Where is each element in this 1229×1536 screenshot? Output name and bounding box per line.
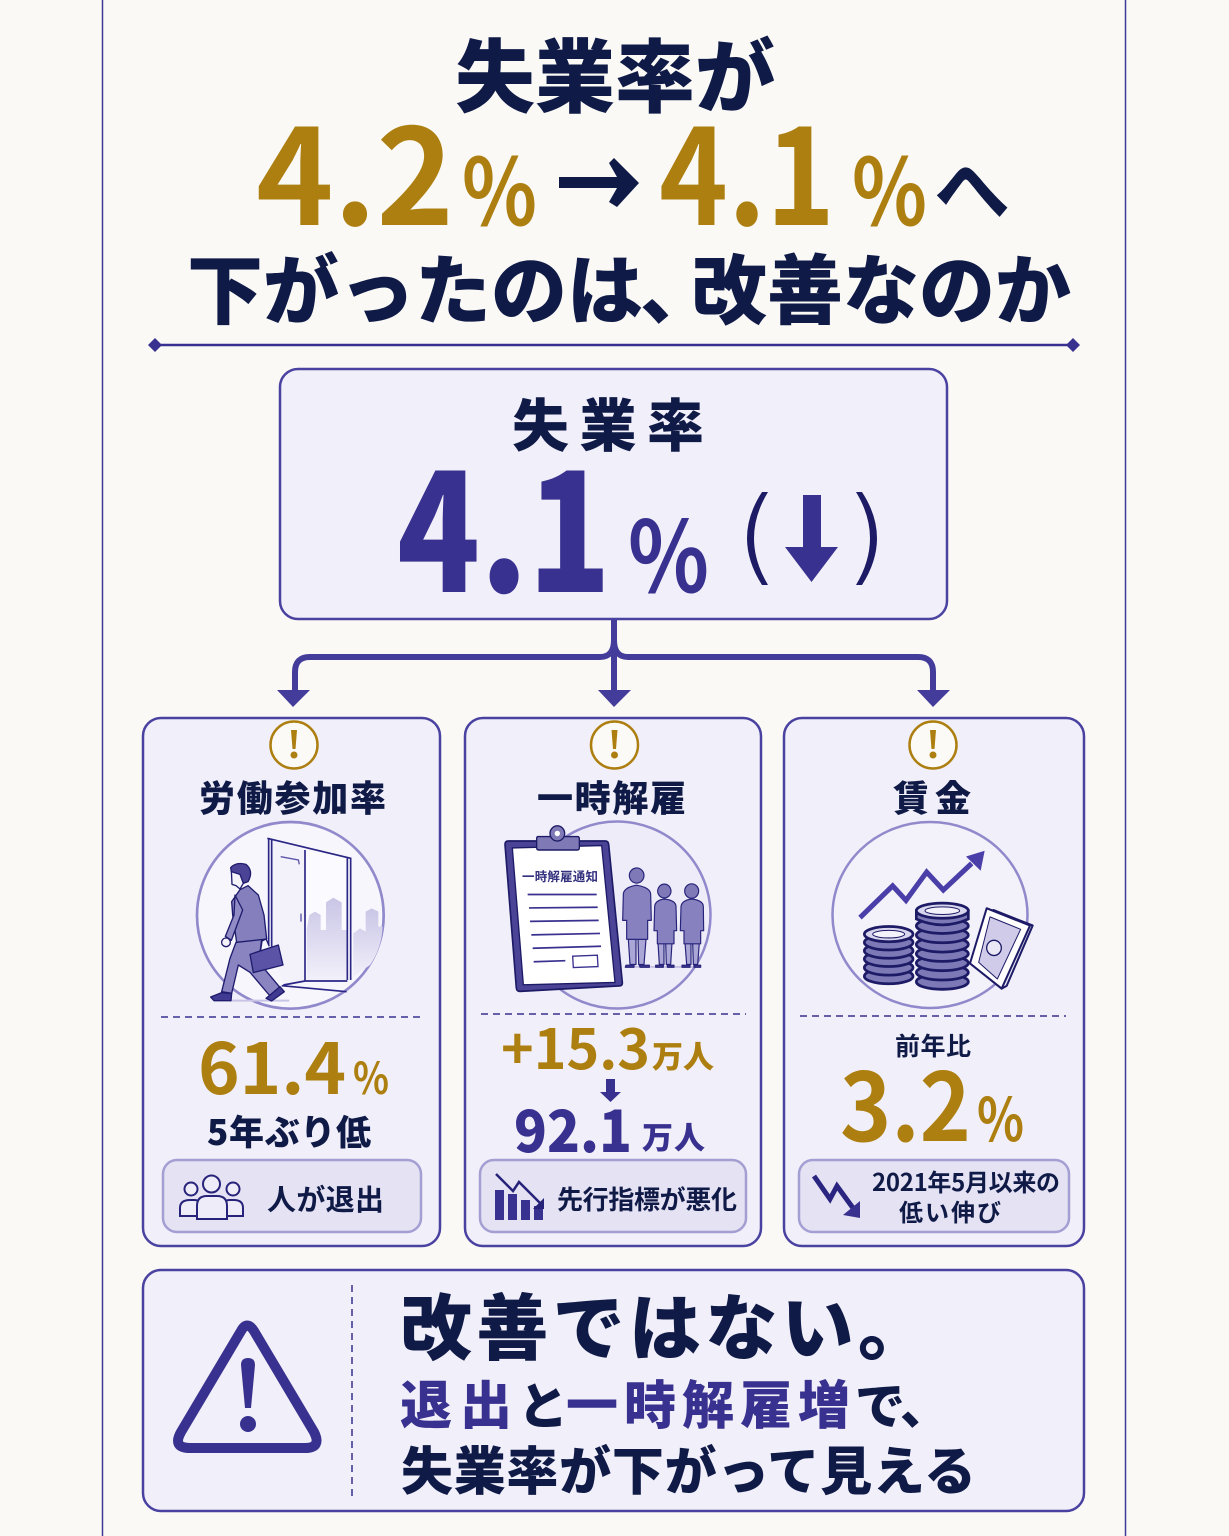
conclusion heading: 改善ではない。 — [400, 1270, 930, 1375]
man — [211, 864, 289, 1001]
icon: warning circle — [910, 722, 956, 768]
coin stacks — [864, 903, 968, 989]
value: 3.2 — [840, 1033, 971, 1169]
card heading: 一時解雇 — [537, 770, 686, 822]
conclusion detail: 、 — [900, 1367, 950, 1439]
icon: falling arrow — [814, 1176, 860, 1218]
icon: warning triangle — [178, 1326, 317, 1448]
clipboard — [505, 826, 622, 991]
title line 3: 下がったのは — [187, 230, 643, 340]
callout: people leaving — [163, 1160, 421, 1232]
title line 2: figures: 4.2 — [256, 72, 454, 264]
icon: falling bars — [495, 1174, 544, 1220]
value: 61.4 — [198, 1014, 346, 1115]
callout: weak growth — [799, 1160, 1069, 1232]
title line 2: figures: へ — [934, 130, 1010, 240]
arrow: connectors to three cards — [277, 620, 950, 707]
title line 3: 、 — [640, 230, 716, 340]
icon: small down arrow — [600, 1079, 621, 1102]
conclusion detail: で — [855, 1367, 905, 1439]
callout text: 2021年5月以来の — [872, 1163, 1060, 1198]
callout text — [872, 1163, 1060, 1228]
icon: down arrow in brackets — [747, 492, 877, 585]
increase value: +15.3 — [501, 1005, 650, 1085]
panel: labor participation — [143, 718, 440, 1246]
callout: leading indicators — [480, 1160, 746, 1232]
conclusion detail: 失業率が下がって見える — [401, 1430, 976, 1505]
workers — [623, 868, 704, 967]
panel: headline rate — [280, 369, 947, 639]
dashed divider — [481, 1013, 746, 1015]
title — [187, 14, 1071, 340]
value: % — [353, 1043, 389, 1107]
title line 3 — [187, 230, 1071, 340]
title divider — [148, 338, 1080, 352]
title line 1: 失業率が — [455, 14, 775, 130]
title line 2: figures: % — [852, 119, 927, 252]
arrow between figures — [559, 158, 639, 207]
icon: people — [180, 1176, 243, 1219]
callout text: 先行指標が悪化 — [557, 1180, 737, 1217]
increase value — [501, 1005, 714, 1085]
value label: 前年比 — [895, 1027, 971, 1063]
icon: warning circle — [270, 722, 318, 768]
title line 2: figures: 4.1 — [659, 72, 835, 264]
rising arrow — [860, 863, 972, 918]
note: 5年ぶり低 — [207, 1105, 371, 1156]
total value: 92.1 — [514, 1087, 632, 1169]
clipboard heading: 一時解雇通知 — [522, 866, 598, 885]
title line 2: figures: % — [462, 119, 537, 252]
title line 3: 改善なのか — [691, 230, 1071, 340]
conclusion detail — [400, 1364, 976, 1505]
callout text: 人が退出 — [267, 1177, 384, 1219]
increase value: 万人 — [652, 1032, 714, 1077]
title line 2: figures — [256, 72, 1010, 264]
card heading: 労働参加率 — [199, 770, 386, 822]
callout text: 低い伸び — [899, 1193, 1001, 1228]
conclusion detail: 退出 — [400, 1364, 512, 1439]
headline value: 4.1 — [397, 403, 611, 639]
percent sign: % — [628, 479, 709, 621]
conclusion detail: と — [518, 1367, 568, 1439]
illustration: notice and three workers — [505, 822, 710, 1008]
banknotes — [970, 908, 1033, 989]
value: % — [977, 1072, 1024, 1159]
door and city — [267, 838, 383, 992]
panel: wages — [784, 718, 1084, 1246]
total value: 万人 — [642, 1113, 705, 1158]
conclusion detail: 一時解雇増 — [566, 1364, 850, 1439]
illustration: coins and rising arrow — [832, 822, 1033, 1008]
dashed divider — [351, 1285, 353, 1497]
dashed divider — [161, 1016, 422, 1018]
panel: temporary layoffs — [465, 718, 761, 1246]
total value — [514, 1087, 705, 1169]
dashed divider — [800, 1015, 1066, 1017]
icon: warning circle — [591, 722, 638, 768]
card heading: 賃金 — [893, 770, 971, 822]
panel heading: 失業率 — [512, 381, 704, 463]
illustration: man leaving through a door — [197, 822, 384, 1009]
panel: conclusion — [143, 1270, 1084, 1511]
